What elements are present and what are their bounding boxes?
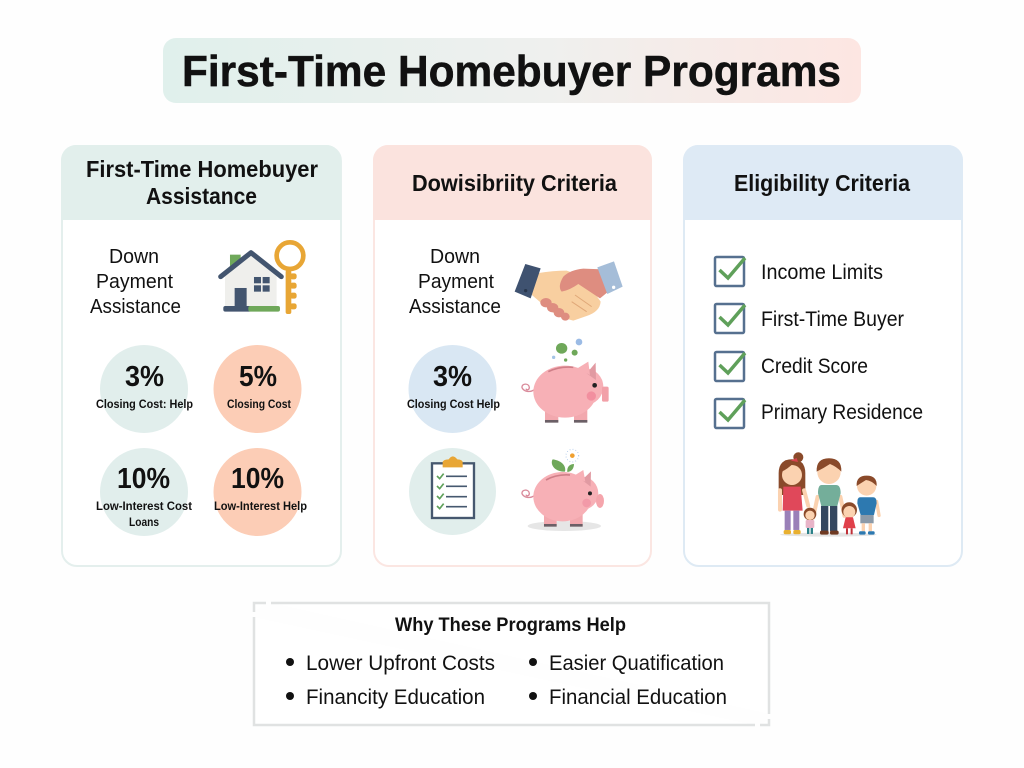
panel header [683,145,963,220]
checklist item: primary residence [715,399,923,428]
panel header [61,145,341,220]
father [811,458,847,535]
stat: 3% closing cost help: Closing Cost Help [407,397,500,411]
checklist item: income limits: Income Limits [761,261,883,284]
benefits list: Lower Upfront Costs [306,652,495,675]
panel: why these programs help [254,603,769,725]
stat: 10% low-interest cost loans: Low-Interest Cost [96,499,192,513]
boy [857,476,881,535]
title: First-Time Homebuyer Programs [182,47,841,96]
stat: 5% closing cost: 5% [239,361,277,393]
panel: dowisibriity criteria [373,145,652,566]
checklist item: first-time buyer: First-Time Buyer [761,308,904,331]
stat: 10% low-interest cost loans [96,448,192,536]
stat: 3% closing cost help [407,345,500,433]
down payment text: Payment [418,271,494,293]
stat: 3% closing cost help: Closing Cost: Help [96,397,193,411]
stat: 10% low-interest help: Low-Interest Help [214,499,307,513]
checklist item: income limits [715,257,883,286]
icon: house and key [221,242,303,314]
panel header: Dowisibriity Criteria [412,170,617,196]
benefits list: Easier Quatification [549,652,724,675]
stat: 3% closing cost help [96,345,193,433]
stat: 10% low-interest help: 10% [231,463,284,495]
stat: 5% closing cost: Closing Cost [227,397,291,411]
checklist item: credit score [715,352,868,381]
benefits list: Financial Education [549,686,727,709]
panel header: Eligibility Criteria [734,170,910,196]
down payment text [90,246,181,318]
stat: 5% closing cost [214,345,302,433]
panel header: Assistance [146,183,257,209]
down payment text: Down [109,246,159,268]
icon: piggy bank with sprout [522,449,604,531]
mother [778,452,811,534]
benefits list: Financity Education [306,686,485,709]
checklist item: credit score: Credit Score [761,355,868,378]
checklist item: primary residence: Primary Residence [761,401,923,424]
down payment text [409,246,501,318]
small girl [804,508,816,534]
small child in red [842,502,857,534]
down payment text: Down [430,246,480,268]
icon: handshake [515,261,623,321]
down payment text: Payment [96,271,173,293]
icon: family [778,452,881,537]
checklist item: first-time buyer [715,304,904,333]
panel header: First-Time Homebuyer [86,156,318,182]
panel: eligibility criteria [683,145,963,566]
benefits list [286,652,727,709]
stat: 10% low-interest help [214,448,307,536]
stat: 10% low-interest cost loans: Loans [129,515,159,529]
panel heading: Why These Programs Help [395,615,626,636]
icon: piggy bank with coins [522,339,609,423]
down payment text: Assistance [409,296,501,318]
panel: first-time homebuyer assistance [61,145,341,566]
stat: 3% closing cost help: 3% [125,361,164,393]
down payment text: Assistance [90,296,181,318]
icon: clipboard checklist in circle [409,448,496,535]
stat: 3% closing cost help: 3% [433,361,472,393]
stat: 10% low-interest cost loans: 10% [117,463,170,495]
panel header [373,145,652,220]
